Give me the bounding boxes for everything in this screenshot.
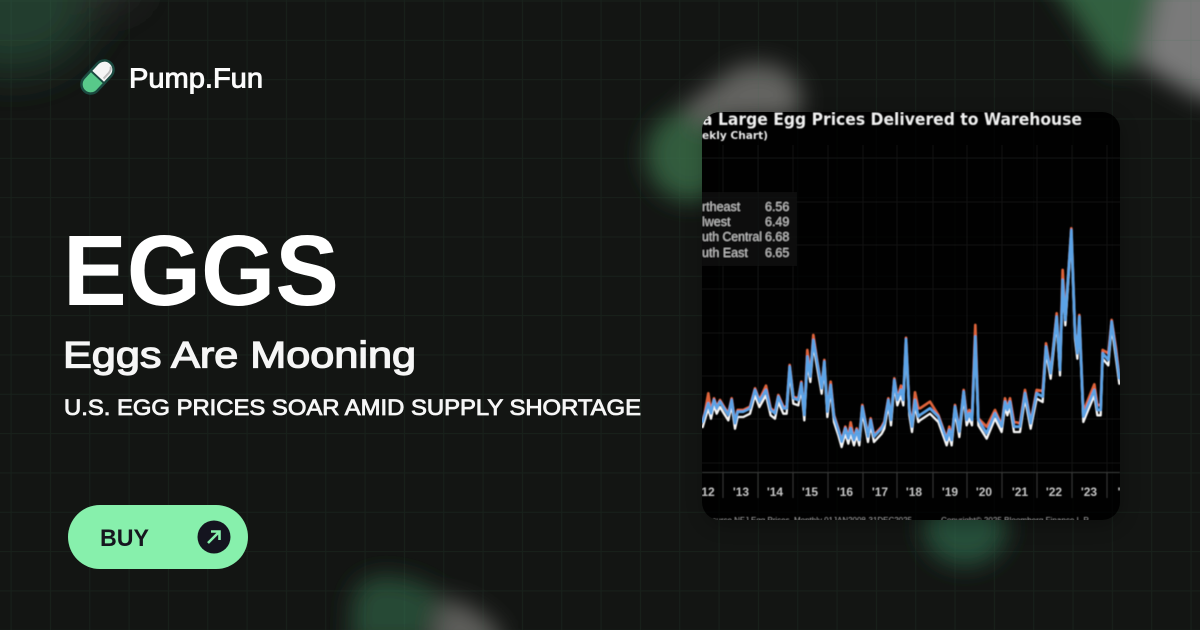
blurred pill: bottom centre: [350, 576, 500, 630]
chart x axis: '13: [733, 485, 749, 499]
title: EGGS: [63, 215, 339, 327]
chart legend: rtheast: [702, 200, 741, 214]
chart x axis: [701, 472, 1121, 499]
subtitle: Eggs Are Mooning: [63, 334, 416, 376]
logo wordmark: Pump.Fun: [129, 62, 263, 94]
chart legend: 6.68: [765, 230, 789, 244]
chart copyright: Copyright© 2025 Bloomberg Finance L.P.: [941, 516, 1090, 525]
chart legend: 6.49: [765, 215, 789, 229]
chart x axis: '16: [837, 485, 853, 499]
chart x axis: '19: [942, 485, 958, 499]
button label: BUY: [100, 525, 149, 552]
buy button: [68, 505, 248, 569]
chart x axis: '21: [1012, 485, 1028, 499]
icon: pill logo: [76, 55, 119, 99]
line chart: regional egg prices: [703, 228, 1119, 447]
chart legend: 6.56: [765, 200, 789, 214]
chart title: a Large Egg Prices Delivered to Warehouse: [702, 110, 1082, 129]
chart image panel: [701, 110, 1121, 525]
chart x axis: '14: [767, 485, 783, 499]
chart x axis: '17: [872, 485, 888, 499]
chart x axis: '22: [1046, 485, 1062, 499]
blurred pill: top right: [1036, 0, 1200, 108]
chart legend: uth Central: [702, 230, 762, 244]
chart legend: lwest: [702, 215, 731, 229]
chart legend: uth East: [702, 246, 748, 260]
chart x axis: '18: [906, 485, 922, 499]
chart subtitle: ekly Chart): [702, 129, 768, 142]
chart x axis: 12: [701, 485, 715, 499]
blurred pill: bottom under chart: [923, 490, 1007, 566]
chart legend: [702, 192, 797, 266]
chart legend: 6.65: [765, 246, 789, 260]
tagline: U.S. EGG PRICES SOAR AMID SUPPLY SHORTAGE: [64, 395, 641, 420]
icon: arrow in circle: [198, 520, 230, 554]
chart x axis: '23: [1081, 485, 1097, 499]
blurred pill: behind chart: [646, 64, 801, 201]
chart x axis: '15: [802, 485, 818, 499]
chart x axis: ': [1118, 485, 1121, 499]
chart source line: ource NFJ Egg Prices, Monthly 01JAN2008-31DEC2025: [712, 516, 913, 525]
chart x axis: '20: [976, 485, 992, 499]
chart card shadow: [706, 118, 1120, 524]
blurred pill: top left: [0, 0, 140, 73]
